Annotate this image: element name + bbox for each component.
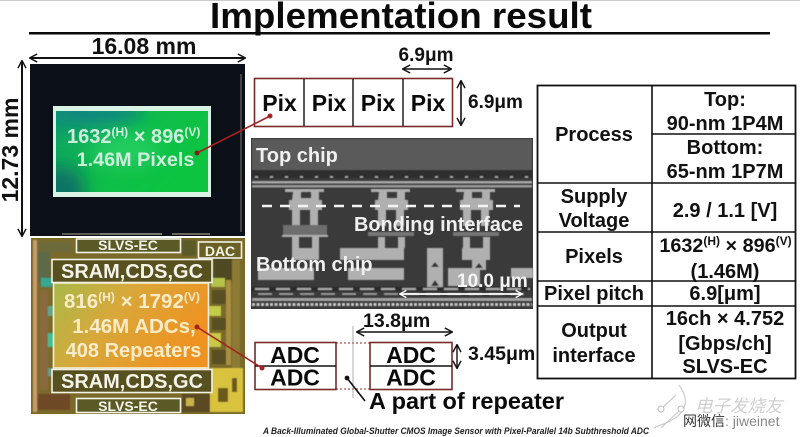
SLVS-EC block bottom (76, 398, 180, 414)
pixel count label: (H) (112, 125, 128, 139)
ADC boxes right (370, 342, 452, 390)
pixel boxes: Pix (411, 90, 445, 116)
ADC count label: (V) (184, 290, 200, 304)
row: pixels: Pixels (565, 246, 623, 268)
row: output interface: Output (561, 320, 627, 342)
panel: ADC pitch diagram (255, 310, 564, 414)
row: process: Top: (704, 89, 746, 111)
row: supply voltage: Voltage (559, 210, 629, 232)
bonded via columns (258, 189, 533, 287)
panel: cross-section SEM image (251, 138, 533, 309)
pixel width dimension: 6.9μm (399, 45, 453, 66)
scale bar (400, 271, 528, 294)
leader line: ADC (194, 324, 264, 370)
row: supply voltage: Supply (561, 186, 628, 208)
ADC count label: 816 (64, 290, 98, 313)
row: pixels: (H) (703, 234, 720, 248)
SLVS-EC block top: SLVS-EC (98, 237, 158, 253)
row: pixels: 1632 (659, 235, 703, 257)
ADC count label: 408 Repeaters (66, 340, 201, 362)
label: bottom chip: Bottom chip (256, 254, 373, 276)
repeater callout (345, 376, 564, 414)
row: pixel pitch (544, 283, 761, 305)
panel: pixel pitch diagram (254, 45, 523, 126)
pixel height dimension (461, 81, 523, 125)
ADC count label: (H) (98, 290, 115, 304)
label: top chip: Top chip (256, 145, 338, 167)
row: output interface: SLVS-EC (682, 356, 768, 378)
ADC count label (64, 290, 201, 362)
watermark: 电子发烧友 (695, 396, 785, 416)
DAC block (198, 242, 242, 259)
panel: top chip photo (30, 64, 245, 236)
pixel count label: (V) (184, 125, 200, 139)
watermark (654, 385, 785, 429)
ADC boxes left: ADC (270, 342, 320, 368)
ADC pitch dimension: 13.8μm (363, 310, 430, 332)
ADC boxes right: ADC (386, 342, 436, 368)
SRAM block top: SRAM,CDS,GC (61, 261, 203, 283)
row: supply voltage: 2.9 / 1.1 [V] (673, 200, 777, 222)
watermark: 网微信: jiweinet (683, 413, 780, 429)
label: bonding interface: Bonding interface (354, 214, 523, 236)
row: output interface: [Gbps/ch] (678, 333, 772, 355)
ADC boxes right: ADC (386, 364, 436, 390)
scale bar: 10.0 μm (457, 271, 528, 292)
row: pixel pitch: Pixel pitch (544, 283, 644, 305)
ADC boxes left (255, 342, 336, 390)
pixel height dimension: 6.9μm (468, 92, 523, 113)
SRAM block bottom: SRAM,CDS,GC (61, 371, 203, 393)
pixel boxes: Pix (361, 90, 395, 116)
row: output interface: interface (552, 345, 636, 367)
ADC count label: 1.46M ADCs, (72, 315, 196, 338)
pixel count label: × 896 (128, 126, 184, 148)
row: supply voltage (559, 186, 777, 232)
row: pixel pitch: 6.9[μm] (689, 283, 761, 305)
pixel count label: 1.46M Pixels (77, 149, 194, 171)
pixel boxes (254, 78, 452, 126)
row: output interface: 16ch × 4.752 (666, 308, 784, 330)
panel: bottom chip photo (31, 237, 245, 414)
ADC count label: × 1792 (115, 290, 184, 313)
footer citation: A Back-Illuminated Global-Shutter CMOS Image Sensor with Pixel-Parallel 14b Subthreshold ADC (262, 426, 649, 436)
pixel count label (67, 125, 200, 171)
SLVS-EC block bottom: SLVS-EC (98, 398, 158, 414)
pixel boxes: Pix (312, 90, 346, 116)
row: process: 90-nm 1P4M (667, 113, 783, 135)
dimension: chip width: 16.08 mm (92, 33, 196, 59)
bonding interface dashed line (262, 205, 520, 207)
pixel array region (53, 106, 211, 197)
row: process: 65-nm 1P7M (667, 161, 783, 183)
row: output interface (552, 308, 784, 378)
row: pixels (565, 234, 792, 283)
pixel boxes: Pix (262, 90, 297, 116)
ADC height dimension: 3.45μm (468, 343, 535, 365)
row: process: Bottom: (687, 137, 763, 159)
row: process (555, 89, 783, 183)
leader line: pixel (194, 114, 272, 156)
row: pixels: (V) (776, 234, 792, 248)
SLVS-EC block top (76, 237, 180, 253)
repeater callout: A part of repeater (369, 388, 564, 414)
ADC boxes left: ADC (270, 364, 320, 390)
DAC block: DAC (205, 243, 235, 259)
row: pixels: (1.46M) (691, 261, 759, 283)
row: pixels: × 896 (720, 235, 776, 257)
row: process: Process (555, 124, 633, 146)
pixel count label: 1632 (67, 126, 112, 148)
ADC array region (54, 283, 208, 368)
specification table (537, 85, 796, 378)
